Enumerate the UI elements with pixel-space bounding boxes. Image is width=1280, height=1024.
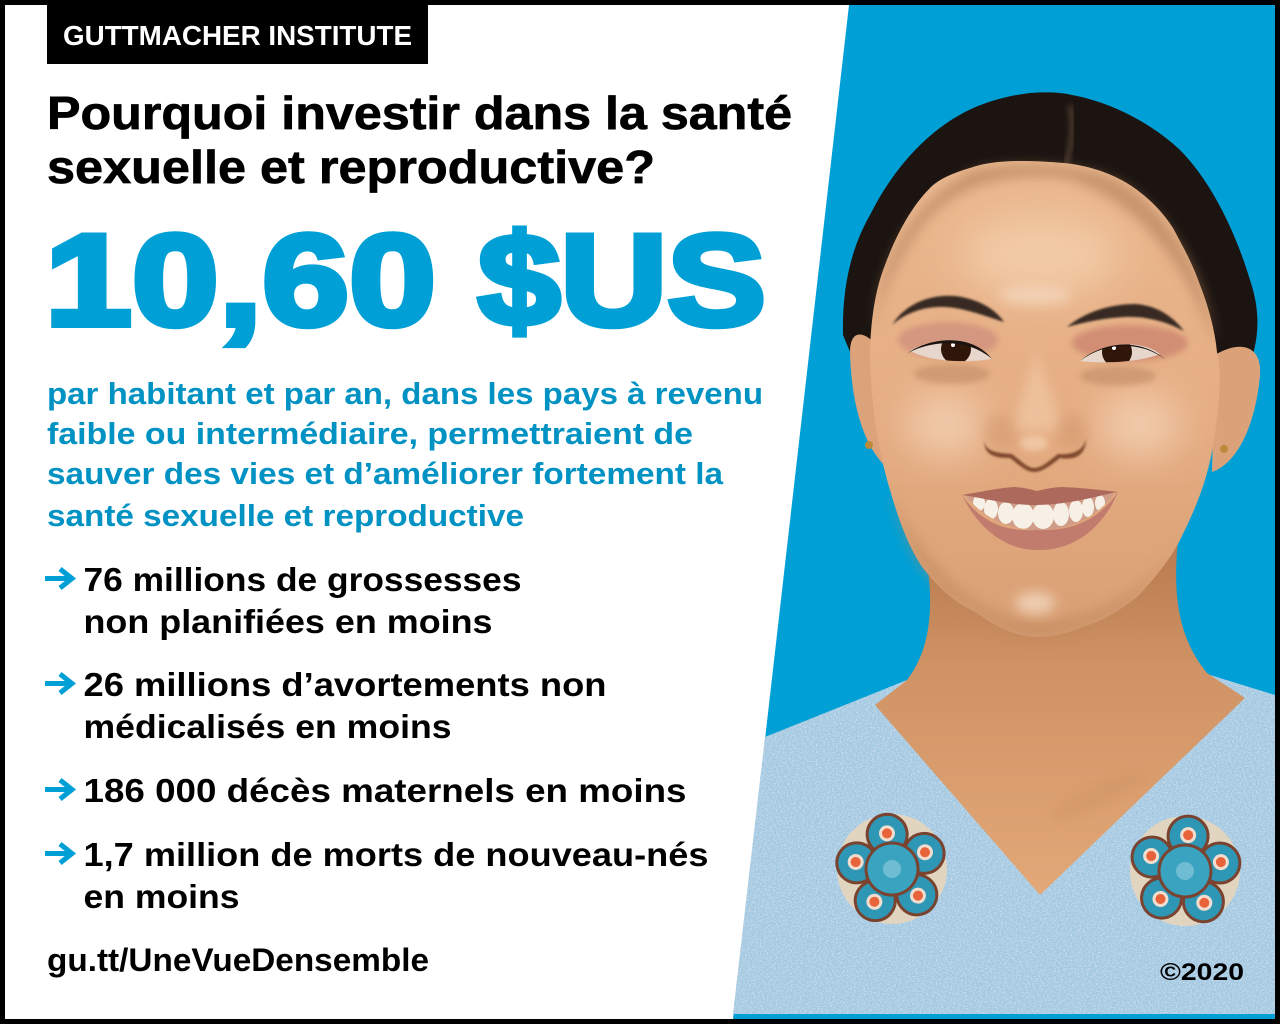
arrow 1 bbox=[45, 569, 72, 588]
bullet 4 text bbox=[84, 836, 708, 915]
bullet 2 text: 26 millions d’avortements non bbox=[84, 666, 606, 703]
title: Pourquoi investir dans la santé bbox=[47, 87, 792, 139]
title: sexuelle et reproductive? bbox=[47, 141, 655, 193]
hair bbox=[843, 92, 1257, 400]
intro paragraph: santé sexuelle et reproductive bbox=[47, 498, 524, 533]
earring right bbox=[1220, 445, 1228, 453]
title bbox=[47, 87, 792, 193]
intro paragraph bbox=[47, 376, 763, 533]
badge: Guttmacher Institute: GUTTMACHER INSTITUTE bbox=[63, 20, 412, 51]
collarbone shading bbox=[1046, 763, 1154, 827]
bullet 3 text: 186 000 décès maternels en moins bbox=[84, 772, 686, 809]
bullet 1 text: non planifiées en moins bbox=[84, 603, 492, 640]
upper lip bbox=[962, 487, 1118, 505]
eye left bbox=[908, 340, 992, 362]
bullet 4 bbox=[45, 836, 708, 915]
big figure: $US bbox=[478, 207, 766, 353]
intro paragraph: sauver des vies et d’améliorer fortement la bbox=[47, 456, 724, 491]
chin highlight bbox=[1015, 592, 1055, 614]
forehead highlight bbox=[960, 215, 1120, 295]
bullet 1 text bbox=[84, 561, 522, 640]
nose bbox=[984, 345, 1088, 472]
source link: gu.tt/UneVueDensemble bbox=[47, 942, 429, 978]
bullet 1 bbox=[45, 561, 522, 640]
arrow 3 bbox=[45, 780, 72, 799]
teeth bbox=[966, 494, 1114, 530]
copyright: ©2020 bbox=[1160, 959, 1244, 986]
lower lip bbox=[962, 492, 1118, 550]
hair part line bbox=[1066, 105, 1072, 164]
shirt bbox=[733, 675, 1275, 1014]
embroidery left bbox=[830, 807, 954, 931]
cheek highlights bbox=[907, 395, 983, 455]
eyebrow left bbox=[892, 296, 1004, 325]
jaw shading bbox=[890, 490, 1180, 637]
hairline soft shade bbox=[873, 164, 1215, 345]
eye right bbox=[1080, 344, 1166, 362]
arrow 4 bbox=[45, 844, 72, 863]
ear left bbox=[850, 334, 884, 465]
bullet 3 bbox=[45, 772, 686, 809]
bullet 1 text: 76 millions de grossesses bbox=[84, 561, 522, 598]
bullet 4 text: 1,7 million de morts de nouveau-nés bbox=[84, 836, 708, 873]
big figure: 10,60 bbox=[45, 207, 436, 353]
neck bbox=[875, 540, 1245, 895]
blue diagonal photo background bbox=[733, 5, 1275, 1019]
bullet 2 text: médicalisés en moins bbox=[84, 708, 451, 745]
arrow 2 bbox=[45, 674, 72, 693]
earring left bbox=[865, 441, 873, 449]
bullet 2 text bbox=[84, 666, 606, 745]
eye shadow left bbox=[898, 322, 998, 358]
badge: Guttmacher Institute bbox=[47, 5, 428, 64]
intro paragraph: faible ou intermédiaire, permettraient de bbox=[47, 416, 693, 451]
under eye right bbox=[1080, 366, 1156, 386]
ear right bbox=[1212, 347, 1260, 472]
eyebrow right bbox=[1067, 304, 1184, 331]
portrait photo bbox=[733, 92, 1275, 1014]
intro paragraph: par habitant et par an, dans les pays à revenu bbox=[47, 376, 763, 411]
white text panel bbox=[5, 5, 865, 1019]
bullet 4 text: en moins bbox=[84, 878, 240, 915]
eye shadow right bbox=[1072, 325, 1188, 361]
smile bbox=[960, 487, 1120, 550]
embroidery right bbox=[1125, 811, 1245, 931]
bullet 2 bbox=[45, 666, 606, 745]
brow highlight bbox=[999, 286, 1071, 304]
face bbox=[870, 161, 1220, 637]
under eye left bbox=[914, 364, 990, 384]
